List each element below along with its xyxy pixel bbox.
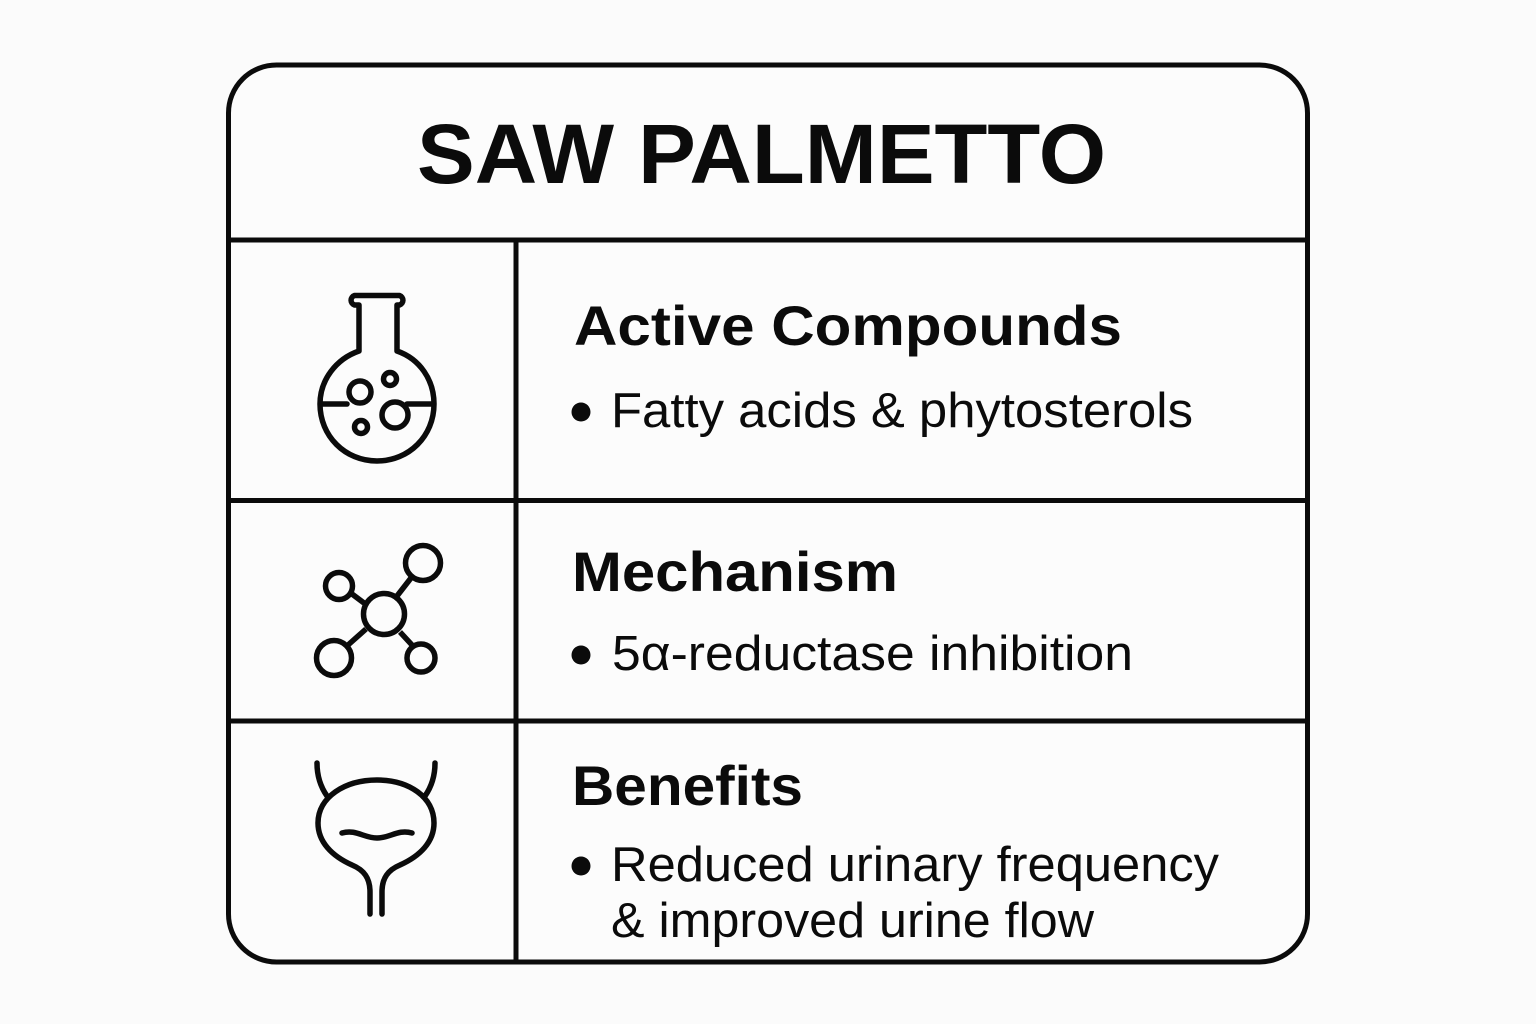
panel: mechanism [316,540,1133,681]
panel: benefits [317,754,1220,948]
icon: molecule [316,546,440,676]
icon: bladder [317,763,435,914]
heading: active compounds: Active Compounds [574,294,1122,357]
heading: mechanism: Mechanism [572,540,898,603]
bullet: reduced urinary frequency [572,838,1220,948]
bullet: 5-alpha-reductase: 5α-reductase inhibition [612,627,1133,681]
panel: active compounds [320,294,1193,461]
bullet: reduced urinary frequency: & improved urine flow [611,894,1095,948]
panel: card outline [228,65,1308,962]
icon: flask [320,296,434,461]
title: SAW PALMETTO [417,107,1106,201]
heading: benefits: Benefits [572,754,803,817]
bullet: fatty acids: Fatty acids & phytosterols [611,384,1193,438]
bullet: reduced urinary frequency: Reduced urinary frequency [611,838,1220,892]
